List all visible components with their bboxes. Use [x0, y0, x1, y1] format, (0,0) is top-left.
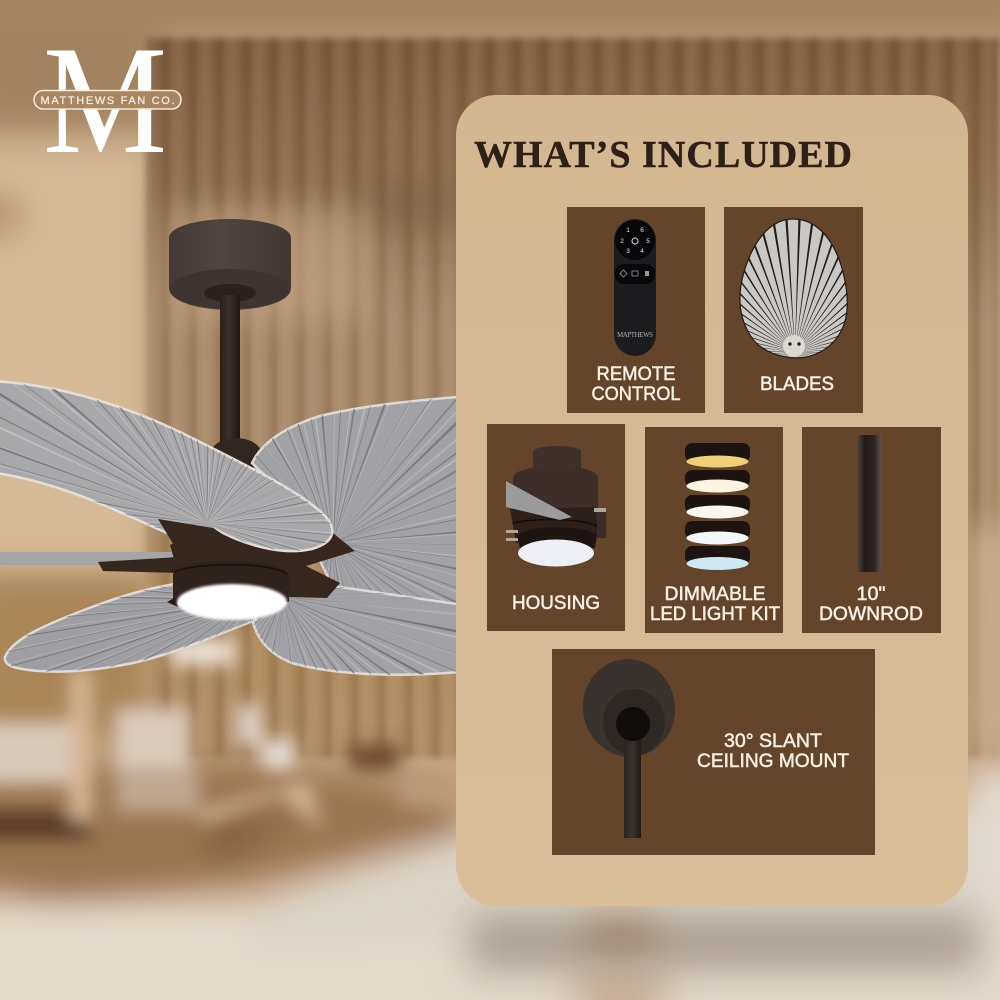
blade: lower right	[252, 586, 456, 676]
label	[650, 584, 780, 625]
label: 30° SLANT	[724, 731, 822, 752]
label: BLADES	[760, 374, 834, 395]
card: remote control	[567, 207, 705, 413]
panel heading: WHAT’S INCLUDED	[474, 134, 852, 176]
fan canopy	[169, 219, 291, 310]
panel: what's included	[456, 95, 968, 906]
label	[697, 731, 849, 772]
icon: remote: MAPTHEWS	[617, 331, 653, 339]
label: DIMMABLE	[664, 584, 766, 605]
label: CONTROL	[592, 384, 680, 405]
hub	[167, 561, 289, 607]
label: LED LIGHT KIT	[650, 604, 780, 625]
card: 10 inch downrod	[802, 427, 941, 633]
icon: housing	[506, 446, 606, 566]
ceiling fan product photo	[0, 219, 470, 730]
card: dimmable LED light kit	[645, 427, 783, 633]
blade: upper left	[0, 380, 334, 552]
label	[592, 364, 680, 405]
card: blades	[724, 207, 863, 413]
label	[819, 584, 923, 625]
logo monogram M: M	[43, 14, 167, 186]
arm front	[158, 519, 233, 562]
icon: remote: 6	[640, 227, 644, 234]
icon: remote: 3	[626, 248, 630, 255]
icon: remote: 4	[640, 248, 644, 255]
blade: thin left	[0, 552, 177, 565]
icon: remote: 5	[646, 238, 650, 245]
icon: remote: 2	[620, 238, 624, 245]
icon: LED rings	[685, 443, 750, 570]
icon: remote: 1	[626, 227, 630, 234]
icon: slant mount	[574, 651, 684, 838]
label: CEILING MOUNT	[697, 751, 849, 772]
label: 10"	[856, 584, 886, 605]
label: DOWNROD	[819, 604, 923, 625]
blade arms	[98, 530, 355, 598]
icon: downrod	[858, 435, 881, 572]
LED light	[177, 584, 287, 620]
logo name pill: MATTHEWS FAN CO.	[40, 95, 174, 107]
icon: remote	[614, 219, 656, 356]
icon: blade	[739, 218, 848, 359]
blade: upper right	[250, 396, 456, 603]
blade: lower left	[4, 583, 258, 673]
card: 30 degree slant ceiling mount	[552, 649, 875, 855]
downrod	[220, 295, 240, 445]
label: REMOTE	[596, 364, 676, 385]
logo	[34, 14, 181, 186]
logo name pill	[34, 90, 181, 109]
motor top	[210, 438, 262, 472]
card: housing	[487, 424, 625, 631]
label: HOUSING	[512, 593, 600, 614]
